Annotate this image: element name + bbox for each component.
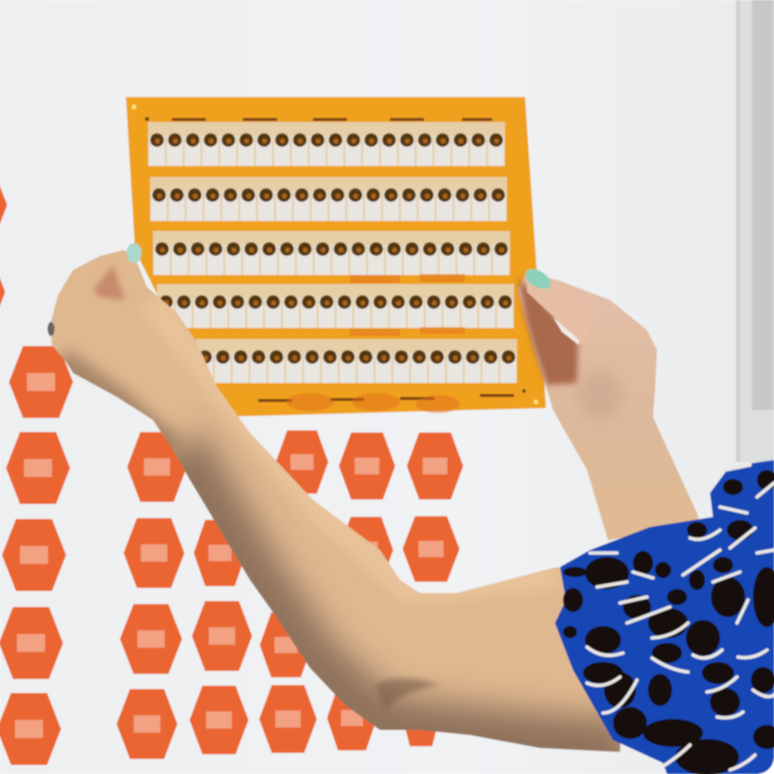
sleeve stripes [587, 465, 774, 770]
left arm and hand [40, 240, 640, 760]
curled fingers [518, 278, 578, 385]
elbow crease [375, 678, 440, 710]
slots along board edge [172, 118, 514, 402]
orange hexagons on the wall [0, 183, 463, 765]
mounting holes [132, 104, 136, 110]
grey pillar at right edge [736, 0, 774, 462]
nail: right thumb [522, 265, 554, 293]
orange board [126, 97, 546, 417]
rounded bottom-right corner [758, 758, 774, 774]
wrist shadow [578, 370, 622, 420]
gap between thumb and fingers [553, 317, 579, 345]
nail: left thumb [126, 243, 142, 263]
sensor rows [148, 122, 505, 166]
patterned blue sleeve [555, 460, 774, 774]
sleeve spots [563, 470, 774, 774]
ring [48, 322, 54, 336]
red-orange traces showing through [286, 274, 465, 413]
hand and forearm silhouette [518, 272, 700, 540]
arm silhouette with soft shading [40, 240, 640, 760]
right hand and forearm [518, 265, 700, 540]
sensor sheet [126, 97, 546, 417]
fold between fingers [93, 265, 125, 300]
thumb [527, 272, 598, 345]
